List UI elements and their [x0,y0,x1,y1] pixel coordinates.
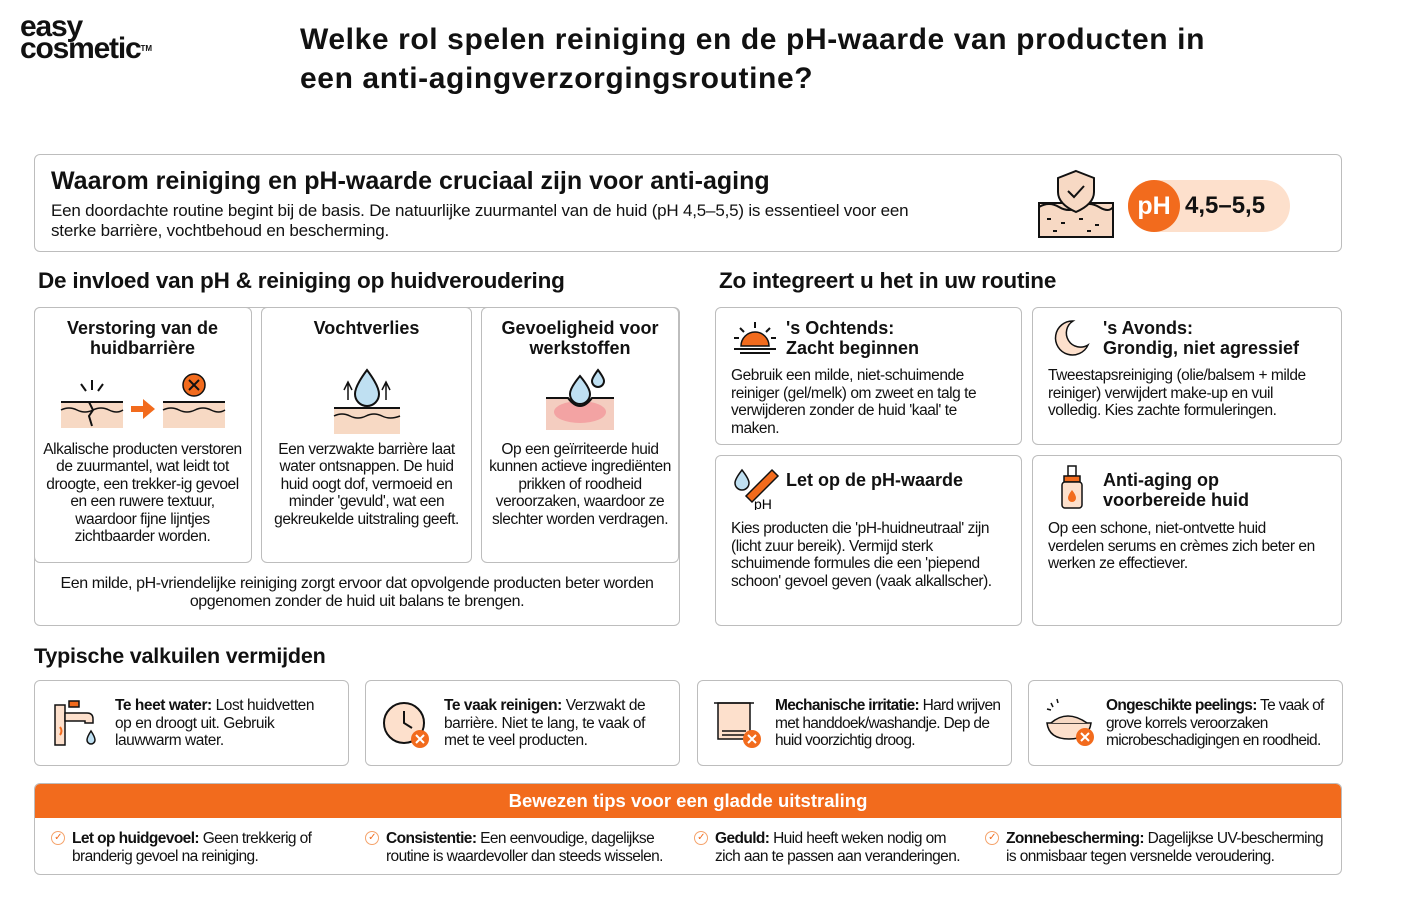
pitfall: hot water: Te heet water: Lost huidvetten op en droogt uit. Gebruik lauwwarm water. [115,697,314,749]
icon: pH strip [734,468,779,510]
pitfall: hot water [34,680,349,766]
pitfall: peelings: Ongeschikte peelings: Te vaak of grove korrels veroorzaken microbeschadigingen en roodheid. [1106,697,1324,749]
tips header: Bewezen tips voor een gladde uitstraling [509,790,867,811]
card: sensitivity: Gevoeligheid voor [501,318,659,338]
tip 3: ✓ [697,832,705,843]
card: pH: Kies producten die 'pH-huidneutraal' zijn (licht zuur bereik). Vermijd sterk schuimende formules die een 'piepend schoon' gevoel geven (vaak alkallscher). [731,520,992,590]
icon: tap [54,700,96,746]
section heading left: De invloed van pH & reiniging op huidveroudering [38,268,565,293]
card: sensitivity [481,306,679,562]
card: moisture [261,306,472,562]
logo [20,10,152,65]
pitfall: mechanical [697,680,1012,766]
tip 4: ✓ [988,832,996,843]
card: evening: Grondig, niet agressief [1103,338,1299,358]
icon: moon [1054,320,1090,356]
section heading pitfalls: Typische valkuilen vermijden [34,644,326,668]
card: pH [715,455,1022,626]
text: Alkalische producten verstoren de zuurmantel, wat leidt tot droogte, een trekker-ig gevoel en een ruwere textuur, waardoor fijne lijntjes zichtbaarder worden. [43,440,242,545]
card: barrier [34,306,252,562]
card: barrier: huidbarrière [90,338,195,358]
icon: serum bottle [1061,465,1083,509]
card: evening: 's Avonds: [1103,318,1193,338]
text: Op een geïrriteerde huid kunnen actieve ingrediënten prikken of roodheid veroorzaken, waardoor ze slechter worden verdragen. [489,440,671,528]
card: evening: Tweestapsreiniging (olie/balsem + milde reiniger) verwijdert make-up en vuil volledig. Kies zachte formuleringen. [1048,367,1306,419]
card: morning: 's Ochtends: [786,318,894,338]
pitfall: too often: Te vaak reinigen: Verzwakt de barrière. Niet te lang, te vaak of met te veel producten. [444,697,645,749]
icon: water drop [334,368,400,434]
text: Een verzwakte barrière laat water ontsnappen. De huid huid oogt dof, vermoeid en minder 'gevuld', wat een gekreukelde uitstraling geeft. [274,440,459,528]
card: morning [715,307,1022,445]
pH badge [1128,180,1290,232]
tips header [35,784,1341,818]
logo: easy [20,10,82,43]
card: prepared skin: Op een schone, niet-ontvette huid verdelen serums en crèmes zich beter en werken ze effectiever. [1048,520,1315,572]
logo: cosmeticTM [20,32,152,65]
icon: bowl [1046,698,1094,746]
section heading right: Zo integreert u het in uw routine [719,268,1056,293]
card: morning: Gebruik een milde, niet-schuimende reiniger (gel/melk) om zweet en talg te verwijderen zonder de huid 'kaal' te maken. [731,367,976,436]
icon: sunrise [734,322,776,354]
card: sensitivity: werkstoffen [529,338,631,358]
pH badge: 4,5–5,5 [1185,192,1265,219]
card: barrier: Verstoring van de [67,318,218,338]
title [300,23,1205,95]
tip 2: ✓ [368,832,376,843]
pitfall: too often [365,680,680,766]
icon: towel [714,702,761,748]
intro panel [34,154,1342,252]
panel: tips [34,783,1342,875]
panel: influence [34,307,680,626]
card: morning: Zacht beginnen [786,338,919,358]
footer text: Een milde, pH-vriendelijke reiniging zorgt ervoor dat opvolgende producten beter worden opgenomen zonder de huid uit balans te brengen. [60,575,654,610]
card: moisture: Vochtverlies [314,318,419,338]
tip 4: Zonnebescherming: Dagelijkse UV-bescherming is onmisbaar tegen versnelde veroudering. [1006,830,1323,864]
card: prepared skin: Anti-aging op [1103,470,1219,490]
card: prepared skin [1032,455,1342,626]
icon: irritated skin [546,368,614,430]
tip 2: Consistentie: Een eenvoudige, dagelijkse routine is waardevoller dan steeds wisselen. [386,830,663,864]
icon: shield skin [1038,170,1114,238]
intro heading: Waarom reiniging en pH-waarde cruciaal zijn voor anti-aging [51,167,770,195]
pitfall: mechanical: Mechanische irritatie: Hard wrijven met handdoek/washandje. Dep de huid voorzichtig droog. [775,697,1000,749]
title: een anti-agingverzorgingsroutine? [300,62,813,95]
icon: broken barrier [60,373,226,428]
card: prepared skin: voorbereide huid [1103,490,1249,510]
card: pH: Let op de pH-waarde [786,470,963,490]
tip 1: Let op huidgevoel: Geen trekkerig of branderig gevoel na reiniging. [72,830,311,864]
card: evening [1032,307,1342,445]
pitfall: peelings [1028,680,1343,766]
intro text: Een doordachte routine begint bij de basis. De natuurlijke zuurmantel van de huid (pH 4,5–5,5) is essentieel voor een sterke barrière, vochtbehoud en bescherming. [51,201,908,240]
pH badge: pH [1137,192,1171,220]
tip 1: ✓ [54,832,62,843]
title: Welke rol spelen reiniging en de pH-waarde van producten in [300,23,1205,56]
tip 3: Geduld: Huid heeft weken nodig om zich aan te passen aan veranderingen. [715,830,960,864]
icon: clock [383,702,429,748]
